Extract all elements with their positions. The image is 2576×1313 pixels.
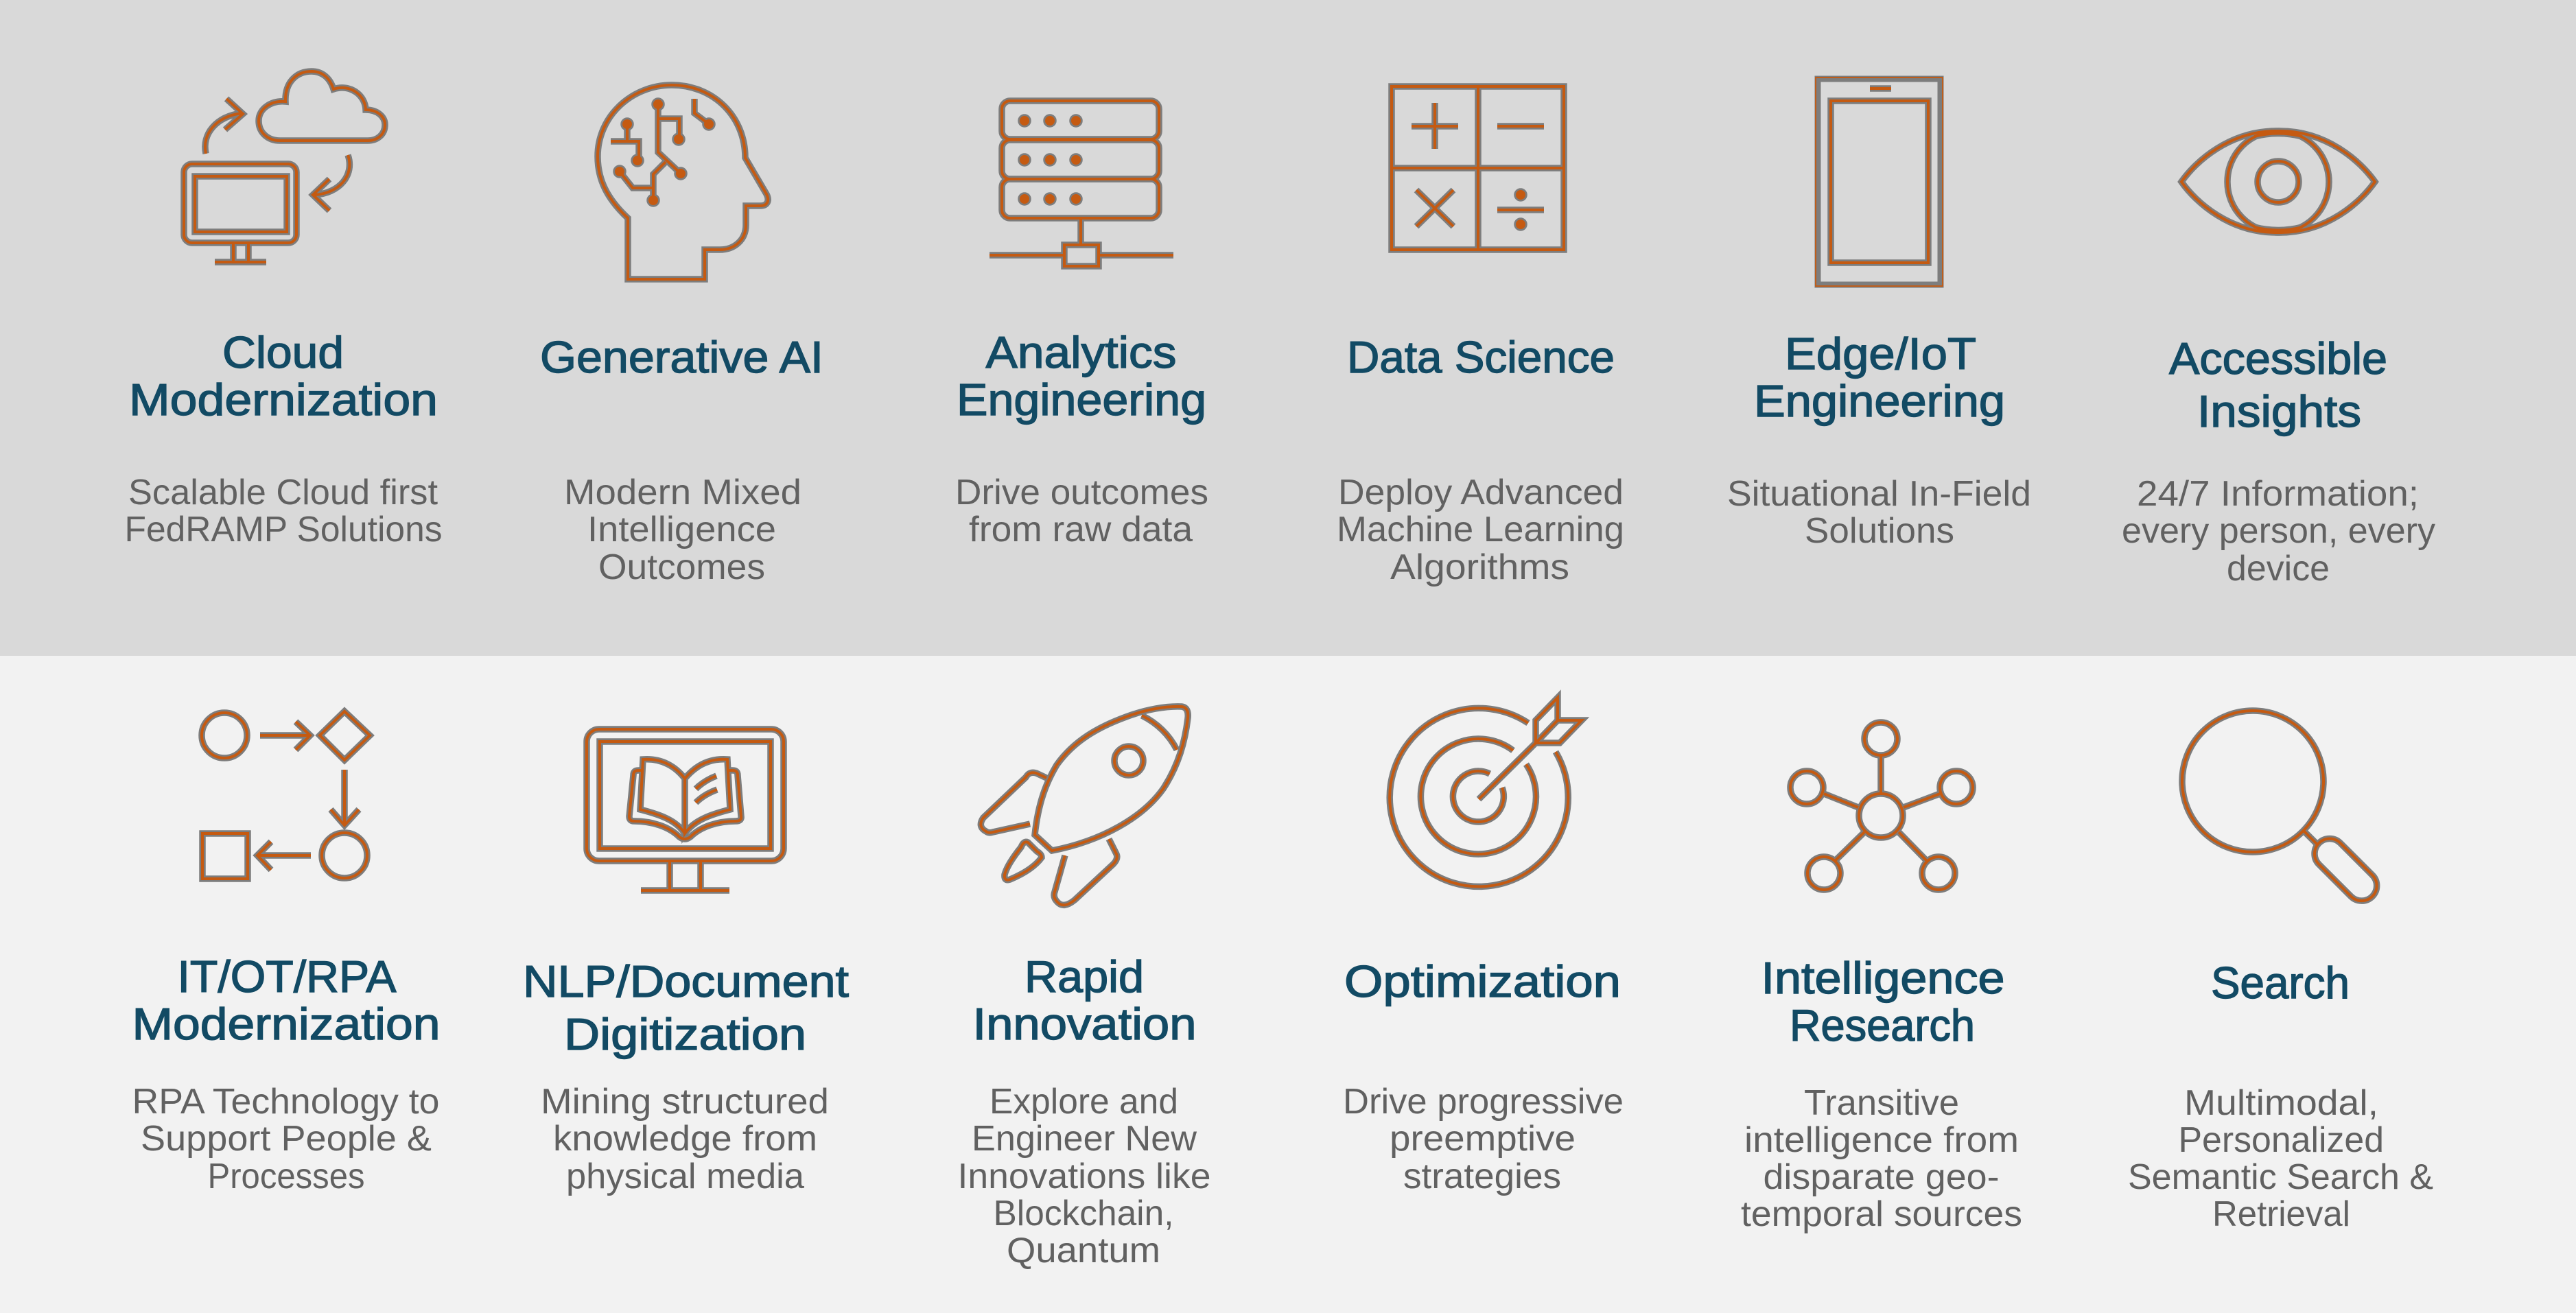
icon: cloud and monitor xyxy=(184,71,385,262)
icon: eye xyxy=(2181,131,2375,233)
panel: Search xyxy=(2128,711,2433,1234)
heading: Data Science: Data Science xyxy=(1347,332,1615,382)
text: Generative AI description: Intelligence xyxy=(587,510,776,549)
text: Rapid Innovation description xyxy=(958,1082,1210,1270)
text: Edge/IoT Engineering description: Solutions xyxy=(1805,511,1954,551)
text: IT/OT/RPA Modernization description: Processes xyxy=(207,1157,365,1196)
text: Intelligence Research description: Transitive xyxy=(1804,1083,1959,1123)
heading: NLP/Document Digitization xyxy=(523,956,849,1059)
text: Intelligence Research description: disparate geo- xyxy=(1764,1157,2000,1197)
panel: IT/OT/RPA Modernization xyxy=(132,711,441,1196)
heading: IT/OT/RPA Modernization xyxy=(132,951,441,1049)
text: Rapid Innovation description: Engineer New xyxy=(972,1119,1197,1159)
heading: Cloud Modernization xyxy=(129,327,438,425)
text: Data Science description: Deploy Advanced xyxy=(1338,473,1624,512)
heading: Cloud Modernization: Cloud xyxy=(222,327,344,377)
icon: calculator operators xyxy=(1392,86,1564,250)
text: IT/OT/RPA Modernization description: Support People & xyxy=(141,1119,432,1159)
heading: Generative AI: Generative AI xyxy=(540,332,823,382)
icon: monitor with book xyxy=(587,729,784,890)
heading: Intelligence Research xyxy=(1761,953,2005,1050)
heading: Edge/IoT Engineering xyxy=(1754,329,2005,426)
icon: network nodes xyxy=(1790,722,1973,890)
heading: IT/OT/RPA Modernization: Modernization xyxy=(132,999,441,1049)
text: Accessible Insights description xyxy=(2122,474,2435,589)
heading: Edge/IoT Engineering: Engineering xyxy=(1754,376,2005,426)
icon: rocket xyxy=(981,707,1188,905)
heading: Accessible Insights xyxy=(2169,333,2387,436)
text: IT/OT/RPA Modernization description xyxy=(132,1082,439,1196)
text: NLP/Document Digitization description: knowledge from xyxy=(553,1119,817,1159)
heading: Rapid Innovation: Rapid xyxy=(1024,951,1144,1002)
panel: Analytics Engineering xyxy=(955,101,1208,549)
text: Rapid Innovation description: Blockchain, xyxy=(994,1194,1173,1233)
text: Cloud Modernization description xyxy=(125,473,442,549)
text: NLP/Document Digitization description: Mining structured xyxy=(541,1082,829,1122)
heading: Rapid Innovation xyxy=(973,951,1197,1049)
text: Rapid Innovation description: Innovations like xyxy=(958,1157,1210,1196)
panel: Generative AI xyxy=(540,85,823,587)
text: Analytics Engineering description: from raw data xyxy=(969,510,1193,549)
text: Intelligence Research description xyxy=(1741,1083,2022,1234)
text: Edge/IoT Engineering description xyxy=(1727,474,2031,551)
text: Analytics Engineering description xyxy=(955,473,1208,549)
icon: server stack xyxy=(990,101,1173,266)
text: Data Science description: Algorithms xyxy=(1390,547,1569,587)
text: Search description: Retrieval xyxy=(2212,1194,2350,1234)
text: Cloud Modernization description: FedRAMP Solutions xyxy=(125,510,442,549)
icon: mobile device xyxy=(1816,78,1943,286)
panel: Edge/IoT Engineering xyxy=(1727,78,2031,551)
panel: NLP/Document Digitization xyxy=(523,729,849,1196)
heading: Intelligence Research: Intelligence xyxy=(1761,953,2005,1003)
icon: target with arrow xyxy=(1390,698,1582,886)
heading: Analytics Engineering: Engineering xyxy=(957,375,1206,425)
heading: Rapid Innovation: Innovation xyxy=(973,999,1197,1049)
text: IT/OT/RPA Modernization description: RPA Technology to xyxy=(132,1082,439,1122)
text: Search description: Personalized xyxy=(2178,1120,2384,1160)
panel: bottom band background xyxy=(0,656,2576,1313)
panel: Cloud Modernization xyxy=(125,71,442,549)
text: Edge/IoT Engineering description: Situational In-Field xyxy=(1727,474,2031,514)
text: Optimization description: preemptive xyxy=(1390,1119,1576,1159)
panel: Rapid Innovation xyxy=(958,707,1210,1270)
text: Generative AI description: Outcomes xyxy=(598,547,765,587)
text: NLP/Document Digitization description: physical media xyxy=(566,1157,804,1196)
text: Search description: Semantic Search & xyxy=(2128,1157,2433,1197)
heading: Cloud Modernization: Modernization xyxy=(129,375,438,425)
panel: Optimization xyxy=(1343,698,1624,1196)
icon: process flow xyxy=(202,711,370,879)
text: Accessible Insights description: device xyxy=(2227,549,2330,589)
text: Intelligence Research description: intelligence from xyxy=(1744,1120,2019,1160)
icon: head with circuit xyxy=(598,85,768,279)
text: Generative AI description: Modern Mixed xyxy=(564,473,801,512)
text: Analytics Engineering description: Drive outcomes xyxy=(955,473,1208,512)
text: Optimization description xyxy=(1343,1082,1624,1196)
text: Cloud Modernization description: Scalable Cloud first xyxy=(128,473,438,512)
heading: IT/OT/RPA Modernization: IT/OT/RPA xyxy=(177,951,397,1002)
text: Rapid Innovation description: Explore and xyxy=(990,1082,1178,1122)
heading: Edge/IoT Engineering: Edge/IoT xyxy=(1785,329,1976,379)
text: Accessible Insights description: every person, every xyxy=(2122,511,2435,551)
heading: Search: Search xyxy=(2211,958,2350,1008)
panel: Intelligence Research xyxy=(1741,722,2022,1234)
heading: Analytics Engineering: Analytics xyxy=(985,327,1176,377)
text: Rapid Innovation description: Quantum xyxy=(1007,1231,1160,1270)
text: Data Science description xyxy=(1337,473,1624,587)
heading: NLP/Document Digitization: Digitization xyxy=(564,1009,806,1059)
panel: Data Science xyxy=(1337,86,1624,587)
text: Generative AI description xyxy=(564,473,801,587)
heading: Analytics Engineering xyxy=(957,327,1206,425)
text: Intelligence Research description: temporal sources xyxy=(1741,1194,2022,1234)
panel: top band background xyxy=(0,0,2576,656)
text: Optimization description: strategies xyxy=(1403,1157,1561,1196)
text: Data Science description: Machine Learning xyxy=(1337,510,1624,549)
text: NLP/Document Digitization description xyxy=(541,1082,829,1196)
text: Optimization description: Drive progressive xyxy=(1343,1082,1624,1122)
heading: Accessible Insights: Insights xyxy=(2197,386,2361,436)
text: Accessible Insights description: 24/7 Information; xyxy=(2137,474,2419,514)
heading: Accessible Insights: Accessible xyxy=(2169,333,2387,383)
heading: Intelligence Research: Research xyxy=(1790,1000,1975,1050)
icon: magnifying glass xyxy=(2182,711,2383,907)
heading: Optimization: Optimization xyxy=(1344,956,1621,1006)
panel: Accessible Insights xyxy=(2122,131,2435,589)
heading: NLP/Document Digitization: NLP/Document xyxy=(523,956,849,1006)
text: Search description xyxy=(2128,1083,2433,1234)
text: Search description: Multimodal, xyxy=(2184,1083,2378,1123)
